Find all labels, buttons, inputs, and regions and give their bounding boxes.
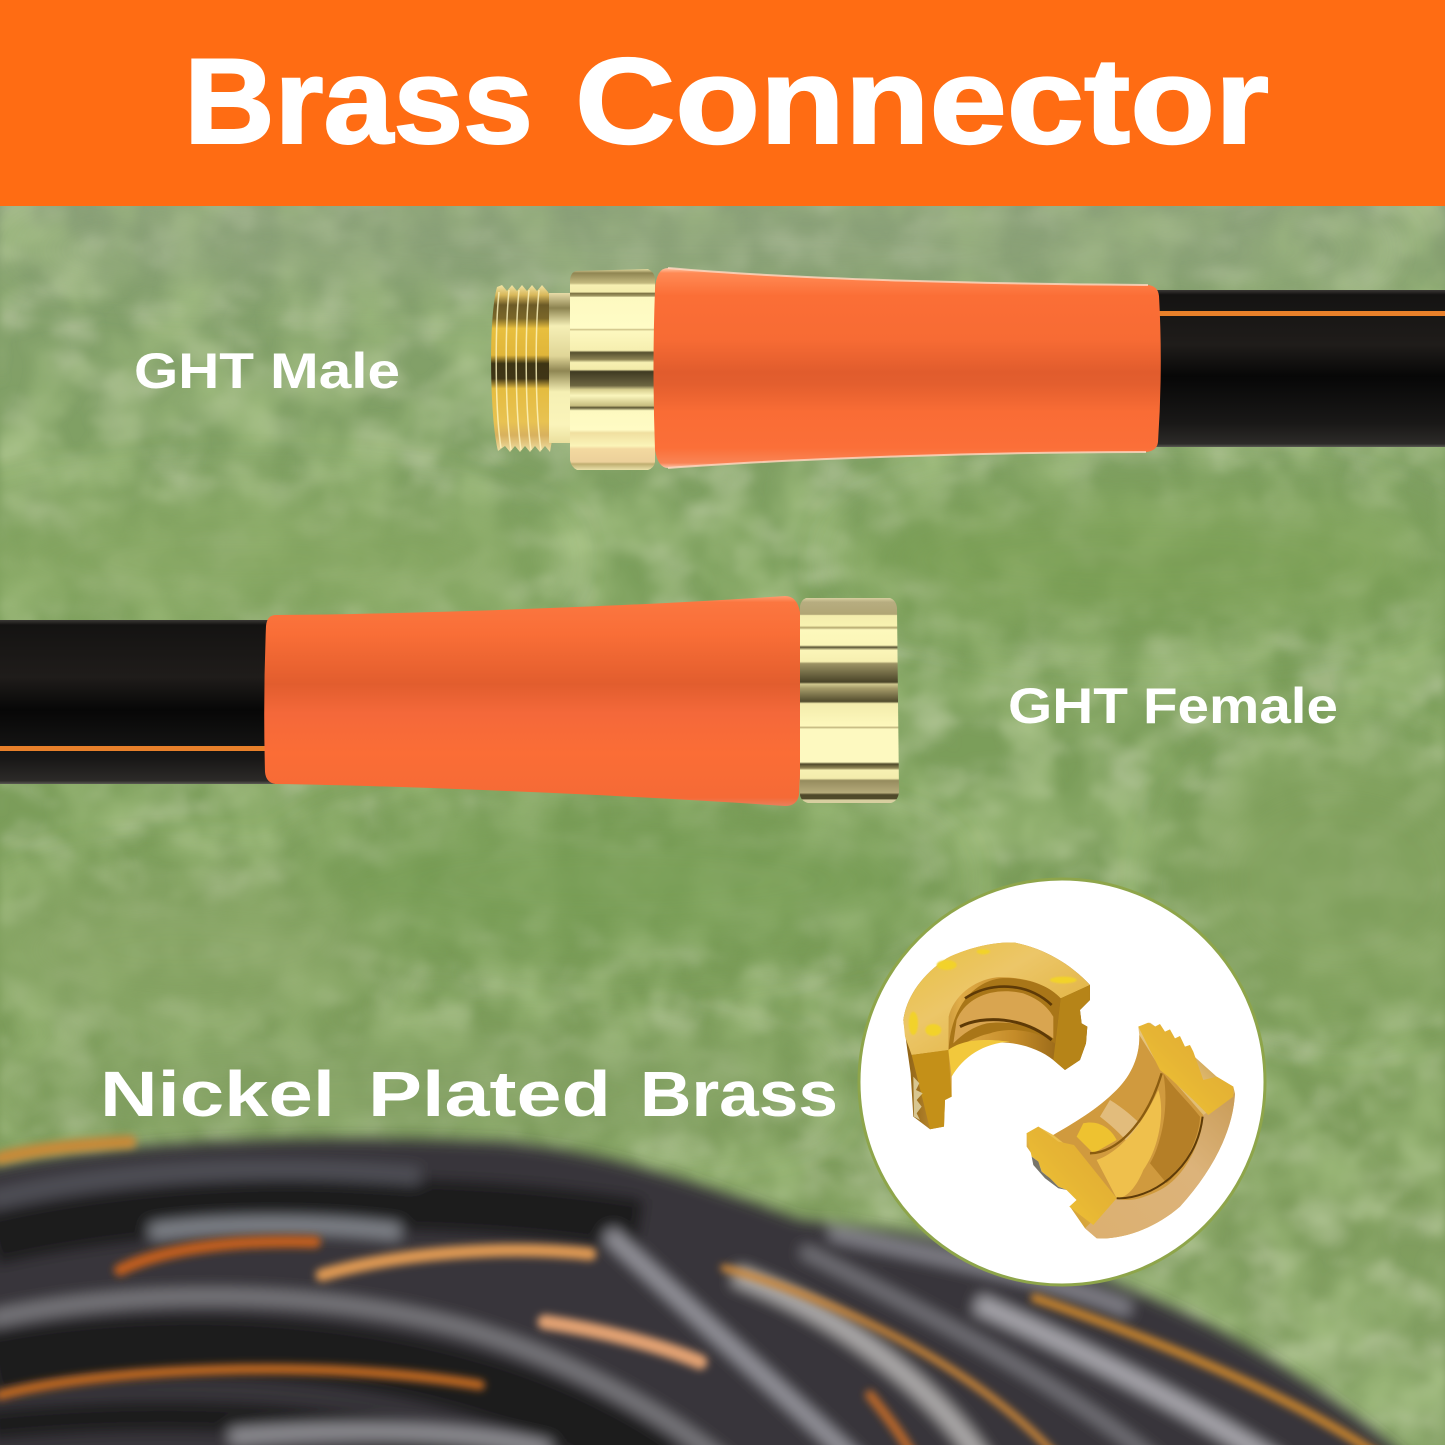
female orange sleeve xyxy=(264,596,802,806)
bottom blurred coiled hose xyxy=(0,1139,1420,1445)
female connector: hose, sleeve and brass fitting xyxy=(0,596,899,806)
label: GHT Male xyxy=(134,343,400,399)
male brass nut xyxy=(570,269,655,470)
brass piece: lower right half xyxy=(1027,1023,1235,1238)
female brass nut xyxy=(800,598,899,803)
label: Nickel Plated Brass xyxy=(100,1058,838,1130)
label: Nickel Plated Brass: Plated xyxy=(368,1058,611,1130)
male orange sleeve xyxy=(654,268,1161,468)
male hose xyxy=(1150,290,1445,447)
title bar xyxy=(0,0,1445,206)
label: Nickel Plated Brass: Nickel xyxy=(100,1058,335,1130)
title: Brass Connector xyxy=(184,33,1269,169)
female hose xyxy=(0,620,275,784)
male connector: hose, sleeve and brass fitting xyxy=(491,268,1445,470)
male thread xyxy=(491,285,572,452)
label: GHT Male: Male xyxy=(270,343,400,399)
title: Brass Connector: Brass xyxy=(184,33,533,169)
callout circle: split brass crimp collar xyxy=(859,879,1265,1285)
label: GHT Female: GHT xyxy=(1008,678,1128,734)
label: GHT Male: GHT xyxy=(134,343,254,399)
brass piece: upper left half xyxy=(903,943,1090,1129)
label: GHT Female: Female xyxy=(1143,678,1338,734)
label: Nickel Plated Brass: Brass xyxy=(640,1058,838,1130)
title: Brass Connector: Connector xyxy=(575,33,1269,169)
label: GHT Female xyxy=(1008,678,1338,734)
